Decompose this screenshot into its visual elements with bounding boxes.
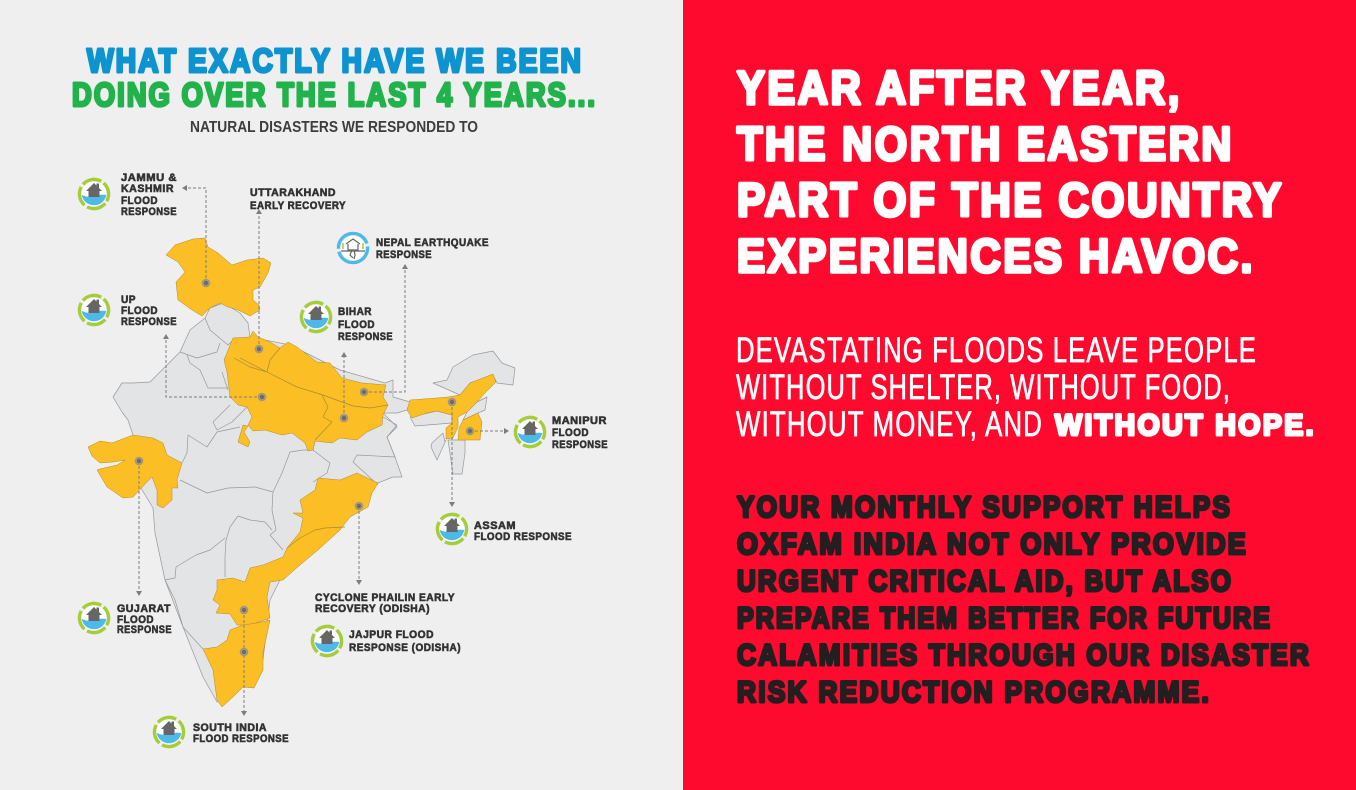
label: Cyclone Phailin: [315, 592, 455, 615]
label: Bihar: FLOOD: [338, 319, 375, 331]
icon: flood, Jajpur: [306, 620, 348, 662]
icon: flood, Assam: [431, 508, 473, 550]
text block: monthly support: [737, 491, 1311, 709]
label: Manipur: [552, 415, 608, 451]
label: Nepal: NEPAL EARTHQUAKE: [376, 237, 489, 249]
label: Manipur: RESPONSE: [552, 439, 608, 451]
map: yellow state borders: [234, 348, 388, 440]
label: Jammu and Kashmir: [121, 172, 177, 218]
label: Uttarakhand: UTTARAKHAND: [250, 187, 336, 199]
map: Jammu and Kashmir: [166, 238, 271, 316]
connector: Nepal: [361, 264, 408, 395]
map of India: [88, 238, 515, 707]
label: Jajpur: RESPONSE (ODISHA): [349, 642, 461, 654]
icon: flood, Manipur: [509, 411, 551, 453]
heading: north eastern havoc: YEAR AFTER YEAR,: [737, 61, 1182, 114]
label: Gujarat: [117, 603, 172, 636]
label: Jammu and Kashmir: RESPONSE: [121, 206, 177, 218]
label: Uttarakhand: EARLY RECOVERY: [250, 200, 346, 212]
label: South India: [193, 722, 289, 745]
map: Odisha, Andhra Pradesh and Telangana: [213, 473, 378, 625]
label: UP: UP: [121, 294, 136, 306]
text block: monthly support: OXFAM INDIA NOT ONLY PROVIDE: [737, 528, 1248, 561]
map: Tamil Nadu and Kerala region: [203, 620, 270, 707]
text block: devastating floods: WITHOUT MONEY, AND: [736, 405, 1043, 444]
label: Cyclone Phailin: RECOVERY (ODISHA): [315, 603, 430, 615]
label: South India: FLOOD RESPONSE: [193, 733, 289, 745]
label: Manipur: MANIPUR: [552, 415, 607, 427]
text block: monthly support: RISK REDUCTION PROGRAMME.: [737, 676, 1211, 709]
map: Uttar Pradesh tail: [238, 425, 250, 447]
label: Gujarat: GUJARAT: [117, 603, 171, 615]
map: Assam: [407, 374, 496, 439]
heading: north eastern havoc: THE NORTH EASTERN: [737, 117, 1234, 170]
panel: left background: [0, 0, 683, 790]
heading: north eastern havoc: EXPERIENCES HAVOC.: [737, 229, 1255, 282]
heading: north eastern havoc: [737, 61, 1284, 282]
connector: Assam: [449, 399, 455, 507]
label: Gujarat: RESPONSE: [117, 624, 172, 636]
icon: flood, Gujarat: [73, 597, 115, 639]
label: Jajpur: JAJPUR FLOOD: [349, 629, 434, 641]
label: Assam: FLOOD RESPONSE: [474, 531, 572, 543]
connector: Jammu and Kashmir: [182, 185, 209, 286]
label: Manipur: FLOOD: [552, 427, 589, 439]
label: Bihar: BIHAR: [338, 306, 372, 318]
icon: flood, South India: [148, 711, 190, 753]
label: Jammu and Kashmir: FLOOD: [121, 195, 158, 207]
map: Odisha inner border: [287, 527, 345, 548]
title: DOING OVER THE LAST 4 YEARS...: [72, 76, 597, 113]
map: Manipur: [458, 413, 482, 440]
icon: flood, Bihar: [295, 296, 337, 338]
text block: monthly support: URGENT CRITICAL AID, BUT ALSO: [737, 565, 1233, 598]
label: Nepal: RESPONSE: [376, 249, 432, 261]
map: grey country base: [113, 303, 410, 702]
label: South India: SOUTH INDIA: [193, 722, 267, 734]
label: Jajpur: [349, 629, 461, 654]
connector: Odisha: [356, 503, 362, 585]
map: grey north eastern states: [410, 351, 515, 474]
connector: Gujarat: [136, 458, 142, 596]
text block: devastating floods: [736, 331, 1316, 444]
panel: right red background: [683, 0, 1356, 790]
map: Gujarat: [88, 435, 182, 508]
connector: UP: [163, 334, 265, 400]
label: UP: FLOOD: [121, 305, 158, 317]
subtitle: NATURAL DISASTERS WE RESPONDED TO: [190, 119, 478, 136]
label: Gujarat: FLOOD: [117, 614, 154, 626]
connector: Bihar: [341, 352, 347, 421]
label: UP: [121, 294, 177, 328]
connector: South India: [241, 607, 247, 716]
text block: monthly support: YOUR MONTHLY SUPPORT HELPS: [737, 491, 1232, 524]
heading: north eastern havoc: PART OF THE COUNTRY: [737, 173, 1284, 226]
label: Assam: ASSAM: [474, 520, 516, 532]
icon: earthquake, Nepal: [338, 233, 368, 263]
label: Jammu and Kashmir: JAMMU &: [121, 172, 177, 184]
title: [72, 42, 597, 113]
label: UP: RESPONSE: [121, 316, 177, 328]
icon: flood, UP: [73, 289, 115, 331]
label: Cyclone Phailin: CYCLONE PHAILIN EARLY: [315, 592, 455, 604]
label: Bihar: [338, 306, 393, 343]
label: Bihar: RESPONSE: [338, 331, 393, 343]
title: WHAT EXACTLY HAVE WE BEEN: [87, 42, 583, 79]
connector: Uttarakhand: [256, 209, 262, 352]
map: Uttarakhand, Uttar Pradesh and Bihar: [224, 331, 388, 451]
icon: flood, Jammu and Kashmir: [73, 173, 115, 215]
map: internal state borders: [165, 318, 397, 649]
label: Jammu and Kashmir: KASHMIR: [121, 183, 174, 195]
label: Uttarakhand: [250, 187, 346, 212]
text block: devastating floods: WITHOUT HOPE.: [1055, 409, 1316, 442]
label: Nepal: [376, 237, 489, 261]
label: Assam: [474, 520, 572, 543]
connector: Manipur: [467, 428, 509, 434]
